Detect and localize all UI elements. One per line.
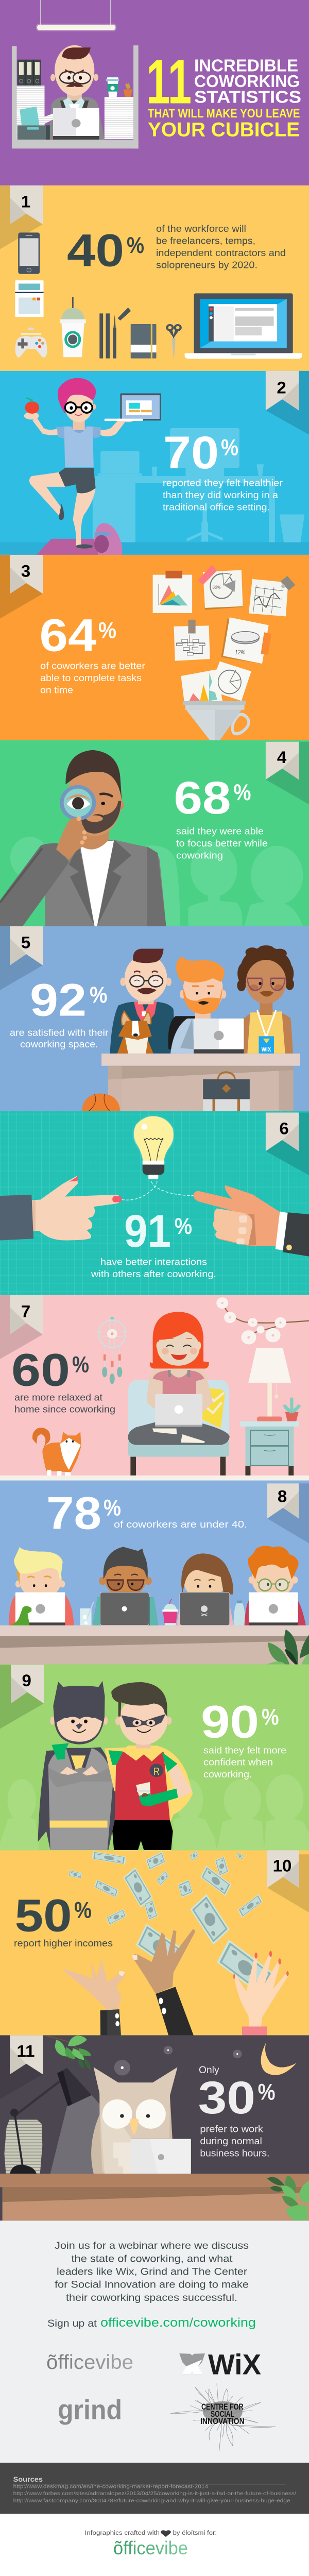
stat: 68%: 68 [174, 772, 231, 824]
stat: 92%: 92 [30, 975, 87, 1026]
text: workforce: independent contractors and [156, 247, 286, 258]
stat: 92% [30, 975, 107, 1026]
text: webinar invitation: their coworking spaces successful. [66, 2292, 237, 2303]
text: relaxed: home since coworking [14, 1404, 115, 1415]
icon: pink drink [162, 1599, 178, 1625]
text: confident: coworking. [203, 1769, 252, 1780]
logo: centre for social innovation [170, 2383, 276, 2451]
text: source links: http://www.forbes.com/sites/adrianalopez/2013/04/25/coworking-is-it-just-a-fad-or-the-future-of-business/ [13, 2491, 296, 2497]
logo: officevibe green: õfficevibe [113, 2538, 188, 2558]
stat: 50%: % [74, 1897, 92, 1923]
illustration: coworker with blond hair [9, 1547, 74, 1626]
illustration: batman [38, 1681, 116, 1850]
text: workforce: of the workforce will [156, 223, 246, 234]
stat: 70%: % [221, 434, 238, 461]
icon: glass of water [80, 1602, 94, 1625]
stat: 64%: % [98, 617, 116, 643]
ribbon badge 5 [0, 926, 43, 990]
stat: 78%: % [104, 1495, 121, 1520]
stat: 60%: 60 [11, 1345, 70, 1396]
icon: dream catcher [98, 1317, 126, 1384]
illustration: coworker with red curly hair [245, 1546, 306, 1625]
illustration: robin: R [153, 1766, 160, 1777]
text: interactions [91, 1257, 216, 1279]
text: webinar invitation: the state of coworking, and what [71, 2253, 233, 2264]
title: STATISTICS [194, 88, 301, 107]
ribbon badge 2 [266, 371, 309, 435]
panel: sources [0, 2463, 309, 2514]
text: focus [176, 826, 268, 860]
stat: 30%: Only [199, 2064, 219, 2076]
stat: 90% [201, 1697, 279, 1748]
text: satisfied: coworking space. [20, 1039, 98, 1049]
text: interactions: have better interactions [100, 1257, 207, 1267]
background silhouette: crowd [0, 1774, 309, 1850]
ribbon badge 3: 3 [21, 562, 30, 580]
ribbon badge 11: 11 [17, 2042, 35, 2061]
background silhouette: coworkers [10, 837, 303, 926]
stat: 91%: 91 [124, 1206, 171, 1257]
title [146, 47, 301, 141]
illustration: woman with laptop on armchair [128, 1312, 230, 1476]
panel: footer credits [0, 2514, 309, 2576]
connection dashed lines [122, 1180, 194, 1200]
text: credit line [85, 2529, 217, 2536]
panel: stat 7 [0, 1295, 309, 1481]
illustration: right hand pointing [193, 1185, 309, 1257]
text: confident [203, 1745, 286, 1780]
text: business hours [200, 2124, 269, 2158]
stat: 30%: 30 [198, 2072, 255, 2124]
icon: plant [266, 1630, 309, 1665]
text: sign up link: officevibe.com/coworking [100, 2316, 256, 2330]
ribbon badge 1: 1 [21, 193, 30, 211]
panel: stat 6 [0, 1111, 309, 1295]
floor [0, 543, 309, 555]
ribbon badge 7 [0, 1295, 43, 1359]
stat: 91%: % [175, 1213, 192, 1239]
panel: stat 5 [0, 926, 309, 1112]
stat: 64% [39, 610, 116, 661]
text: focus: said they were able [176, 826, 264, 837]
ribbon badge 6: 6 [279, 1120, 289, 1138]
illustration: charts on notes falling into funnel: 60% [213, 584, 221, 590]
text: confident: confident when [203, 1757, 273, 1768]
ribbon badge 10: 10 [273, 1857, 291, 1875]
text: business hours: prefer to work [200, 2124, 264, 2134]
text: webinar invitation: for Social Innovation are doing to make [55, 2279, 249, 2291]
ribbon badge 6 [266, 1113, 309, 1175]
panel: stat 3 [0, 555, 309, 740]
stat: 64%: 64 [39, 610, 96, 661]
text: business hours: during normal [200, 2136, 262, 2146]
text: healthier: reported they felt healthier [163, 478, 283, 488]
illustration: three coworkers at desk [82, 945, 300, 1112]
icon: desk plant [267, 2176, 309, 2221]
text: webinar invitation: leaders like Wix, Grind and The Center [57, 2266, 247, 2277]
illustration: office worker in cubicle [12, 45, 139, 148]
rug [0, 1476, 309, 1481]
icons: desk objects [15, 232, 302, 361]
stat: 40% [67, 225, 144, 276]
illustration: robin [52, 1682, 193, 1850]
text: healthier: than they did working in a [163, 489, 279, 500]
ribbon badge 9: 9 [22, 1671, 31, 1690]
text: workforce: be freelancers, temps, [156, 235, 255, 246]
icon: ceiling lamp [36, 0, 116, 31]
illustration: blossom branch [216, 1297, 309, 1344]
title: INCREDIBLE [194, 57, 298, 76]
text: webinar invitation [55, 2240, 249, 2303]
ribbon badge 1 [0, 185, 43, 249]
illustration: owl with laptop [50, 2067, 191, 2174]
text: focus: coworking [176, 850, 223, 860]
text: source links [13, 2484, 296, 2504]
ribbon badge 2: 2 [277, 379, 286, 397]
logo: centre for social innovation: CENTRE FOR [201, 2402, 244, 2412]
background silhouette: office desk [93, 428, 304, 543]
panel: stat 2 [0, 371, 309, 555]
text: healthier [163, 478, 283, 512]
stat: 60% [11, 1345, 89, 1396]
ribbon badge 5: 5 [21, 934, 30, 952]
illustration: three coworkers at desk: WIX [262, 1046, 271, 1053]
stat: 30% [198, 2064, 276, 2124]
table [0, 1625, 309, 1665]
panel: stat 11 [0, 2035, 309, 2221]
text: satisfied: are satisfied with their [10, 1027, 108, 1038]
illustration: cat [32, 1428, 81, 1480]
text: credit line: by éloïtsmi for: [173, 2529, 217, 2536]
illustration: charts on notes falling into funnel [153, 565, 295, 740]
text: interactions: with others after coworking. [91, 1268, 216, 1279]
stat: 40%: % [127, 232, 144, 258]
illustration: woman balancing on yoga mat [24, 378, 161, 555]
panel: webinar call to action [0, 2221, 309, 2463]
stat: 92%: % [90, 982, 107, 1008]
stat: 30%: % [258, 2079, 276, 2105]
title: COWORKING [194, 72, 300, 91]
text: source links: http://www.fastcompany.com/3004788/future-coworking-and-why-it-will-give-your-business-huge-edge [13, 2498, 290, 2504]
icon: water bottle [233, 1601, 245, 1625]
illustration: paper stack and desk lamp [4, 2068, 92, 2174]
illustration: lamp and nightstand [240, 1348, 299, 1476]
text: incomes: report higher incomes [14, 1938, 113, 1948]
panel: stat 8 [0, 1481, 309, 1665]
ribbon badge 11 [0, 2035, 43, 2099]
stat: 50%: 50 [15, 1890, 72, 1941]
illustration: light bulb [133, 1116, 174, 1179]
text: webinar invitation: Join us for a webinar where we discuss [55, 2240, 249, 2251]
illustration: hand center [132, 1929, 196, 2035]
panel: stat 4 [0, 740, 309, 926]
icon: moon and stars [114, 2042, 297, 2076]
stat: 90%: 90 [201, 1697, 259, 1748]
ribbon badge 7: 7 [21, 1302, 30, 1320]
text: relaxed [14, 1392, 115, 1415]
illustration: flying money [68, 1851, 274, 1996]
text: focus: to focus better while [176, 838, 268, 849]
panel: stat 1 [0, 185, 309, 371]
panel: stat 10 [0, 1850, 309, 2035]
text: tasks: able to complete tasks [40, 672, 142, 683]
stat: 60%: % [72, 1351, 89, 1377]
logo: wix [179, 2348, 261, 2380]
panel: stat 9 [0, 1665, 309, 1850]
logo: wix: WiX [208, 2348, 261, 2380]
illustration: hand left [64, 1960, 125, 2035]
illustration: coworker with brown hair [177, 1553, 233, 1625]
stat: 90%: % [262, 1704, 279, 1730]
ribbon badge 8: 8 [278, 1487, 287, 1505]
text: credit line: Infographics crafted with [85, 2529, 160, 2536]
ribbon badge 4 [266, 742, 309, 804]
text: sign up link: Sign up at [47, 2318, 97, 2329]
logo: grind: grind [58, 2395, 122, 2425]
text: workforce [156, 223, 286, 270]
text: relaxed: are more relaxed at [14, 1392, 103, 1402]
text: business hours: business hours. [200, 2148, 269, 2158]
illustration: hand right [233, 1951, 289, 2035]
text: confident: said they felt more [203, 1745, 286, 1756]
text: tasks: on time [40, 685, 73, 695]
stat: 78%: 78 [46, 1488, 101, 1539]
ribbon badge 8 [267, 1483, 309, 1544]
panel: header [0, 0, 309, 185]
stat: 68% [174, 772, 251, 824]
title: YOUR CUBICLE [148, 118, 300, 141]
text: source links: http://www.deskmag.com/en/the-coworking-market-report-forecast-2014 [13, 2484, 209, 2489]
logo: officevibe: õfficevibe [46, 2351, 133, 2374]
desk [0, 2174, 309, 2221]
text: satisfied [10, 1027, 108, 1049]
ribbon badge 9 [0, 1665, 44, 1729]
illustration: coworker with glasses and plaid shirt [93, 1547, 158, 1625]
ribbon badge 3 [0, 555, 43, 619]
ribbon badge 4: 4 [277, 748, 286, 767]
title: 11 [146, 47, 192, 117]
stat: 68%: % [233, 779, 251, 805]
stat: 50% [15, 1890, 92, 1941]
illustration: hanging leaves [47, 2036, 91, 2070]
icon: heart [161, 2530, 171, 2537]
text: tasks [40, 660, 145, 695]
stat: 70%: 70 [163, 427, 219, 479]
illustration: charts on notes falling into funnel: 12% [235, 649, 245, 656]
illustration: left hand pointing [0, 1176, 122, 1240]
stat: 40%: 40 [67, 225, 124, 276]
text: sign up link [47, 2316, 256, 2330]
text: under 40: of coworkers are under 40. [114, 1519, 247, 1530]
illustration: man with magnifying glass [0, 750, 166, 926]
ribbon badge 10 [267, 1850, 309, 1912]
logo: centre for social innovation: INNOVATION [200, 2416, 245, 2426]
text: tasks: of coworkers are better [40, 660, 145, 671]
text: healthier: traditional office setting. [163, 502, 270, 512]
text: workforce: solopreneurs by 2020. [156, 260, 258, 270]
logo: centre for social innovation: SOCIAL [211, 2409, 234, 2419]
heading: sources: Sources [13, 2475, 43, 2483]
